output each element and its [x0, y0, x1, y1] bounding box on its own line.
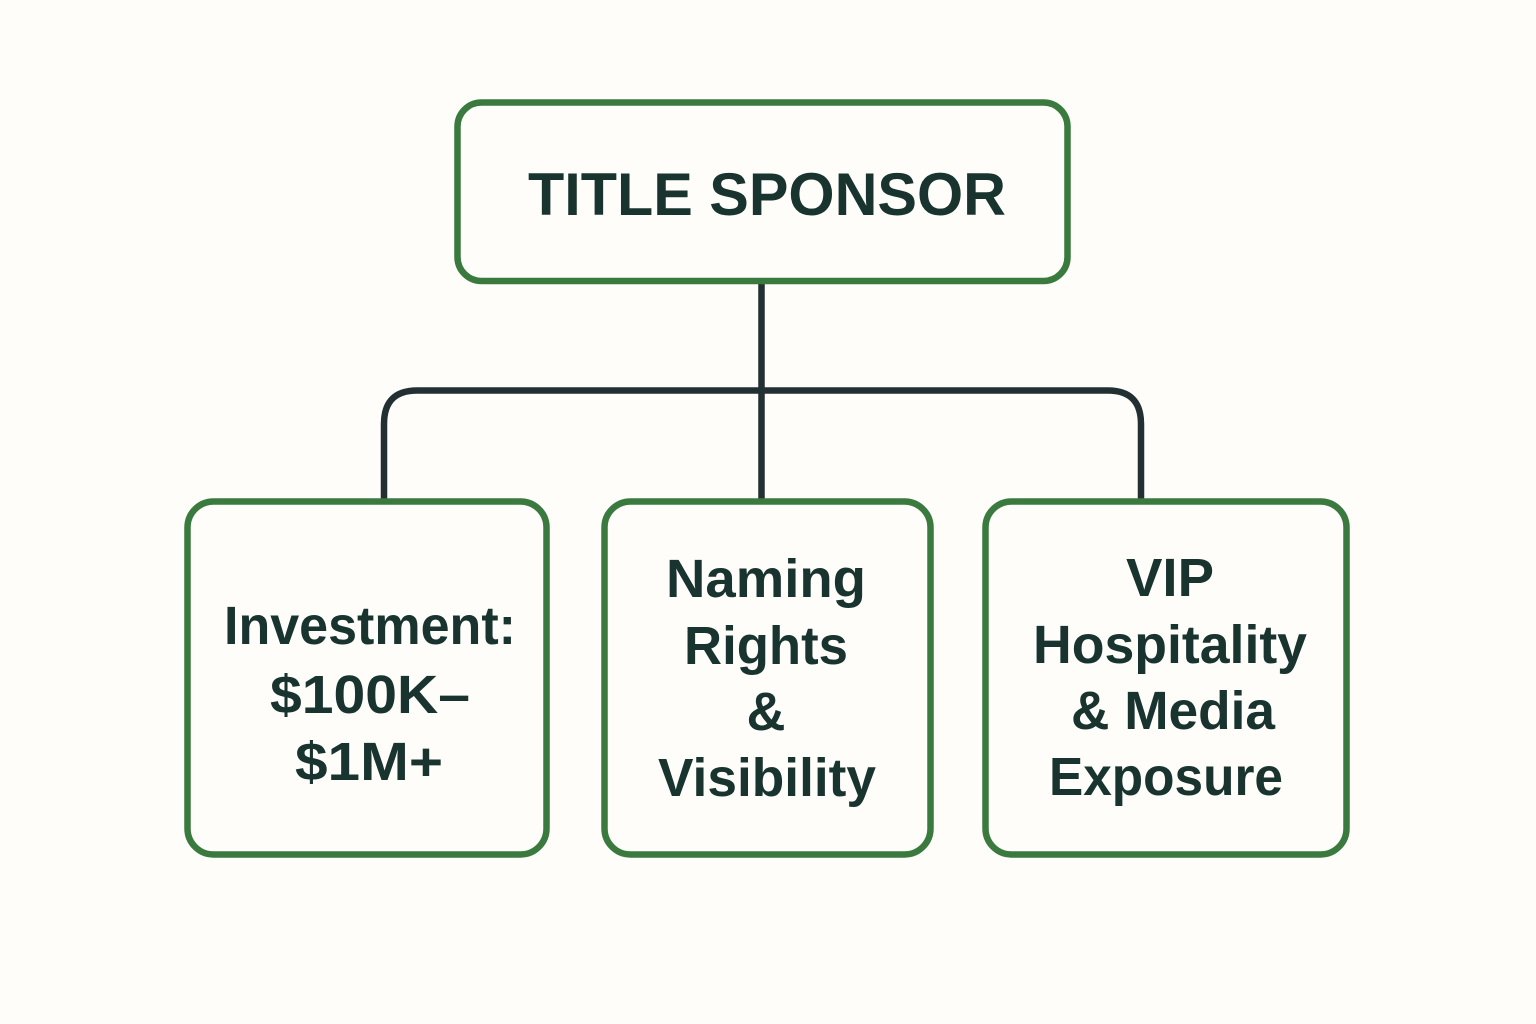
vip hospitality text: Hospitality — [1033, 615, 1307, 675]
naming rights text: Visibility — [658, 748, 876, 808]
naming rights text: Rights — [684, 616, 848, 676]
vip hospitality text: VIP — [1126, 548, 1214, 608]
connector lines — [384, 282, 1141, 500]
panel: investment — [188, 502, 546, 854]
panel: naming rights — [604, 502, 930, 854]
naming rights text: Naming — [666, 549, 866, 609]
vip hospitality text — [1033, 548, 1307, 807]
investment text: $100K– — [270, 665, 470, 725]
vip hospitality text: & Media — [1071, 681, 1276, 741]
investment text — [224, 596, 516, 792]
naming rights text — [658, 549, 876, 808]
title: TITLE SPONSOR — [528, 161, 1006, 228]
title sponsor box — [458, 102, 1068, 281]
investment text: $1M+ — [295, 732, 443, 792]
naming rights text: & — [746, 682, 786, 742]
panel: vip hospitality — [986, 502, 1346, 854]
vip hospitality text: Exposure — [1049, 747, 1283, 807]
investment text: Investment: — [224, 596, 516, 656]
